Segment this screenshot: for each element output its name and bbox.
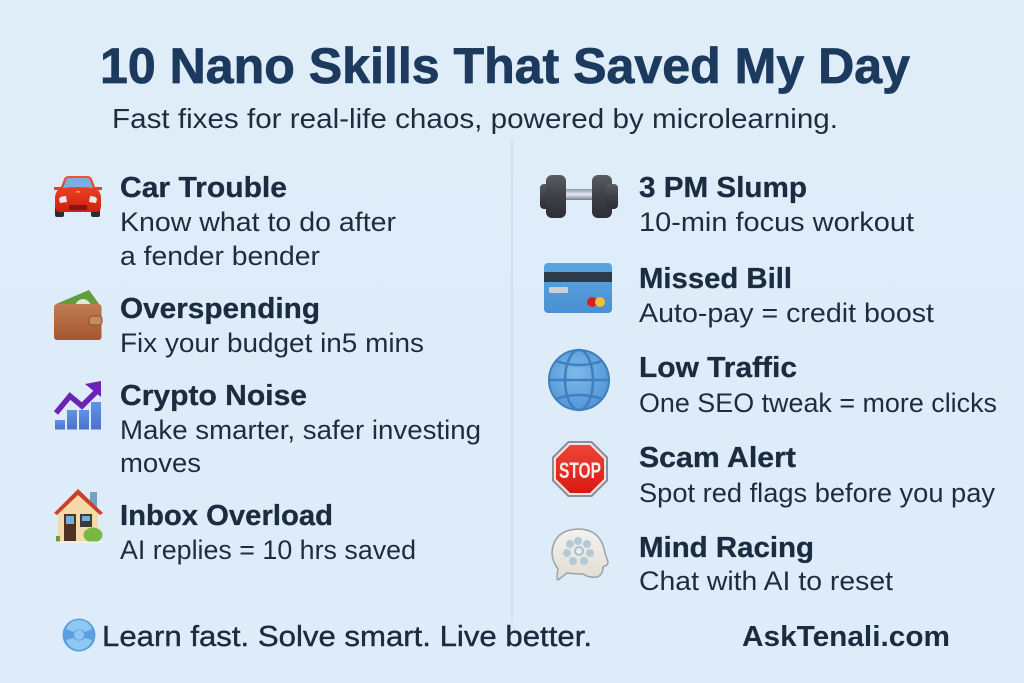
description: Fix your budget in5 mins (120, 328, 424, 358)
description: a fender bender (120, 241, 320, 271)
icon: credit card (544, 263, 612, 313)
icon: house (54, 489, 103, 543)
icon: head speech bubble (552, 529, 608, 580)
icon: wallet (54, 290, 102, 340)
description: Spot red flags before you pay (639, 478, 996, 508)
heading: Low Traffic (639, 352, 797, 384)
footer tagline (62, 618, 592, 653)
item: missed bill (544, 263, 935, 328)
heading: Inbox Overload (120, 500, 333, 532)
description: AI replies = 10 hrs saved (120, 535, 416, 565)
icon: red car (54, 176, 102, 217)
item: crypto noise (55, 380, 481, 478)
icon: stop sign: STOP (559, 458, 601, 483)
description: Chat with AI to reset (639, 566, 894, 596)
tagline text: Learn fast. Solve smart. Live better. (102, 621, 592, 653)
item: mind racing (552, 529, 894, 596)
description: Auto-pay = credit boost (639, 298, 935, 328)
description: Know what to do after (120, 207, 396, 237)
icon: stop sign (552, 441, 608, 497)
description (120, 415, 481, 478)
heading: Car Trouble (120, 172, 287, 204)
description: One SEO tweak = more clicks (639, 388, 997, 418)
heading: Mind Racing (639, 532, 814, 564)
item: overspending (54, 290, 424, 358)
footer brand: AskTenali.com (742, 621, 950, 653)
heading: Overspending (120, 293, 320, 325)
heading: Scam Alert (639, 442, 796, 474)
description (120, 207, 396, 271)
item: scam alert (552, 441, 996, 508)
heading: Crypto Noise (120, 380, 307, 412)
icon: globe (549, 350, 609, 410)
icon: dumbbell (540, 175, 618, 218)
panel: left column (54, 172, 481, 565)
icon: blue orb (62, 618, 96, 652)
description: 10-min focus workout (639, 207, 915, 237)
icon: rising chart (55, 381, 101, 430)
subtitle: Fast fixes for real-life chaos, powered by microlearning. (112, 103, 838, 134)
title: 10 Nano Skills That Saved My Day (100, 38, 910, 94)
description: moves (120, 448, 201, 478)
heading: 3 PM Slump (639, 172, 807, 204)
heading: Missed Bill (639, 263, 792, 295)
description: Make smarter, safer investing (120, 415, 481, 445)
item: 3 PM slump (540, 172, 915, 237)
item: car trouble (54, 172, 396, 271)
item: inbox overload (54, 489, 416, 565)
item: low traffic (549, 350, 997, 418)
panel: right column (540, 172, 997, 596)
